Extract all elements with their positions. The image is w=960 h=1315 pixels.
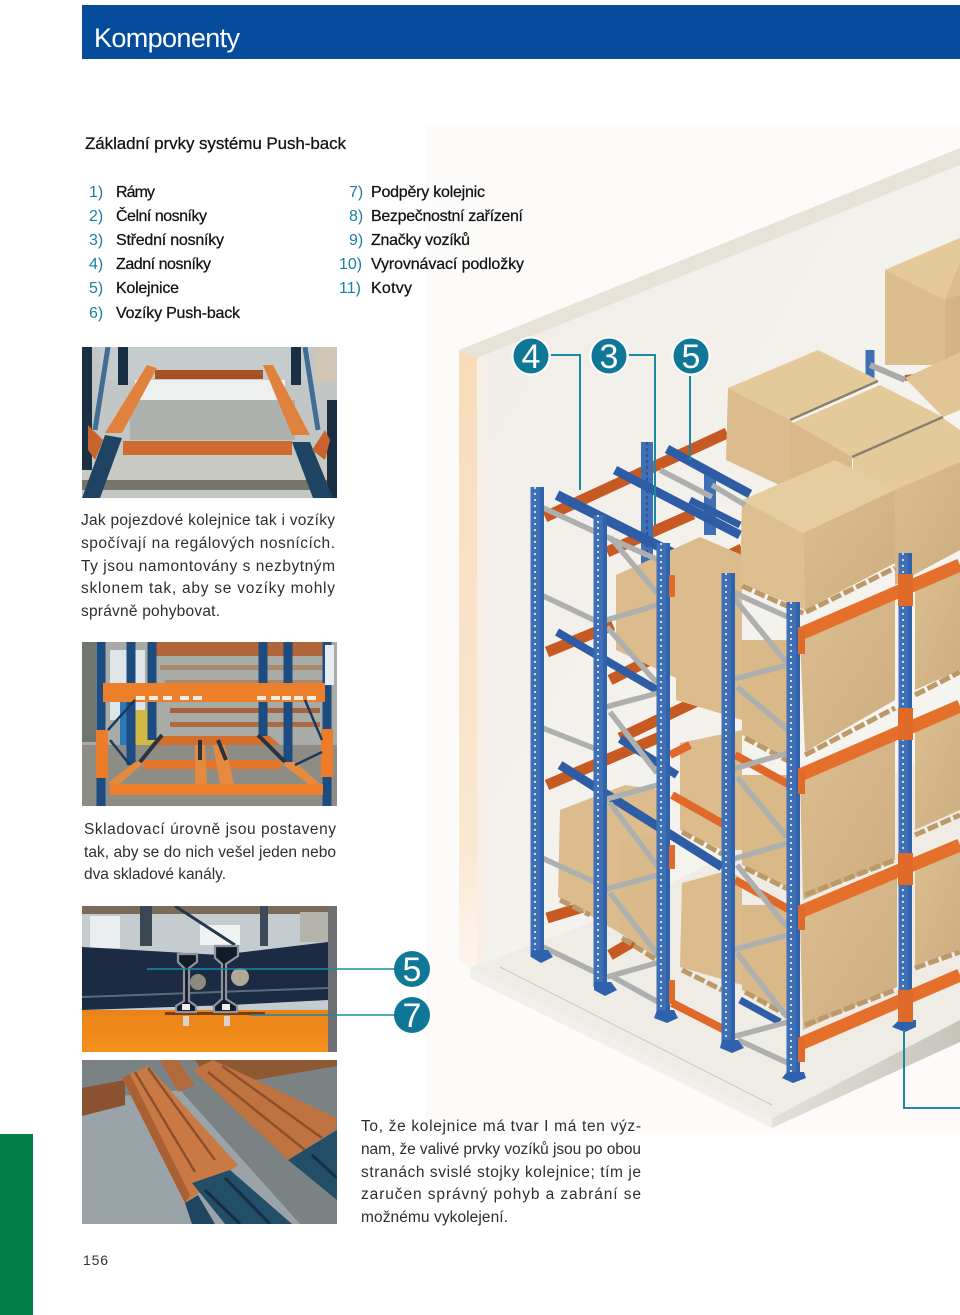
- component list, left column: 2): [89, 208, 103, 225]
- grey frame bracing: [537, 470, 790, 1063]
- caption: storage levels: [84, 821, 336, 883]
- orange post connectors: [669, 574, 913, 1062]
- floor: [470, 740, 960, 1128]
- component list, left column: 5): [89, 280, 103, 297]
- component list, right column: Značky vozíků: [371, 231, 470, 249]
- callout 5 beside photo: [330, 951, 430, 989]
- component list, left column: 4): [89, 256, 103, 273]
- green side tab: [0, 1134, 33, 1315]
- component list, right column: Bezpečnostní zařízení: [371, 208, 524, 225]
- component list, left column: 1): [89, 184, 103, 201]
- cartons, top level rear rows: [726, 350, 960, 585]
- callout 7 beside photo: [330, 997, 430, 1035]
- caption: I-profile: možnému vykolejení.: [361, 1209, 508, 1226]
- component list, left column: Vozíky Push-back: [116, 305, 241, 322]
- caption: rails on beams: spočívají na regálových nosnících.: [81, 535, 335, 552]
- component list, left column: Kolejnice: [116, 280, 179, 297]
- back uprights: [647, 350, 935, 565]
- caption: rails on beams: Jak pojezdové kolejnice tak i vozíky: [81, 512, 335, 529]
- caption: rails on beams: Ty jsou namontovány s nezbytným: [81, 558, 335, 575]
- blue rails, upper: [554, 445, 752, 550]
- leader line to off-page callout: [904, 1030, 960, 1108]
- caption: I-profile: [361, 1118, 641, 1226]
- callout 5 beside photo: 5: [403, 951, 421, 989]
- upright feet: [531, 950, 916, 1083]
- component list, left column: Rámy: [116, 184, 155, 201]
- callout 7 beside photo: 7: [403, 997, 421, 1035]
- caption: rails on beams: správně pohybovat.: [81, 603, 220, 620]
- page number: 156: [83, 1252, 108, 1268]
- cartons, upper right rear: [885, 238, 960, 417]
- component list, left column: [89, 184, 241, 322]
- photo: rail supports: [82, 1060, 337, 1224]
- callout 4: [512, 338, 580, 490]
- lower blue rails: [557, 632, 780, 1022]
- caption: storage levels: tak, aby se do nich vešel jeden nebo: [84, 844, 336, 861]
- component list, right column: Podpěry kolejnic: [371, 184, 485, 201]
- rear orange beam connectors: [670, 745, 790, 1030]
- title: Komponenty: [94, 23, 240, 53]
- uprights: [535, 487, 910, 1077]
- top level front carton: [740, 460, 895, 614]
- caption: rails on beams: sklonem tak, aby se vozíky mohly: [81, 580, 335, 597]
- callout 5: 5: [682, 338, 700, 376]
- faint illustration backdrop: [425, 125, 960, 1135]
- caption: I-profile: stranách svislé stojky kolejnice; tím je: [361, 1164, 641, 1181]
- isometric rack illustration: [459, 148, 960, 1128]
- component list, left column: Střední nosníky: [116, 232, 224, 249]
- photo: I-profile rails: [82, 906, 337, 1052]
- callout 4: 4: [522, 338, 540, 376]
- component list, left column: 6): [89, 305, 103, 322]
- photo: storage levels: [82, 642, 337, 806]
- caption: storage levels: Skladovací úrovně jsou postaveny: [84, 821, 336, 838]
- component list, right column: Vyrovnávací podložky: [371, 256, 524, 273]
- component list, right column: 9): [349, 232, 363, 249]
- caption: I-profile: zaručen správný pohyb a zabrání se: [361, 1186, 641, 1203]
- component list, right column: Kotvy: [371, 280, 412, 297]
- component list, right column: 8): [349, 208, 363, 225]
- component list, right column: 7): [349, 184, 363, 201]
- component list, left column: Zadní nosníky: [116, 256, 211, 273]
- leader line 7 in photo: [250, 1014, 330, 1016]
- callout 3: [590, 338, 655, 525]
- component list, right column: [339, 184, 524, 297]
- cartons, second level: [616, 537, 960, 762]
- caption: storage levels: dva skladové kanály.: [84, 866, 226, 883]
- callout 3: 3: [600, 338, 618, 376]
- component list, left column: Čelní nosníky: [116, 206, 207, 225]
- component list, right column: 11): [339, 280, 361, 297]
- back orange beams: [545, 433, 742, 955]
- photo: rail frame on beams: [82, 347, 337, 498]
- component list, right column: 10): [339, 256, 362, 273]
- section heading: Základní prvky systému Push-back: [85, 134, 346, 153]
- wall: [459, 148, 960, 978]
- callout 5: [672, 338, 710, 460]
- component list, left column: 3): [89, 232, 103, 249]
- caption: I-profile: nam, že valivé prvky vozíků jsou po obou: [361, 1141, 641, 1158]
- cartons, bottom level: [558, 785, 960, 1030]
- caption: I-profile: To, že kolejnice má tvar I má ten výz-: [361, 1118, 641, 1135]
- leader line 5 in photo: [147, 968, 330, 970]
- caption: rails on beams: [81, 512, 335, 620]
- cartons, third level: [680, 710, 960, 900]
- front orange beams: [800, 565, 960, 1044]
- header bar: [82, 5, 960, 59]
